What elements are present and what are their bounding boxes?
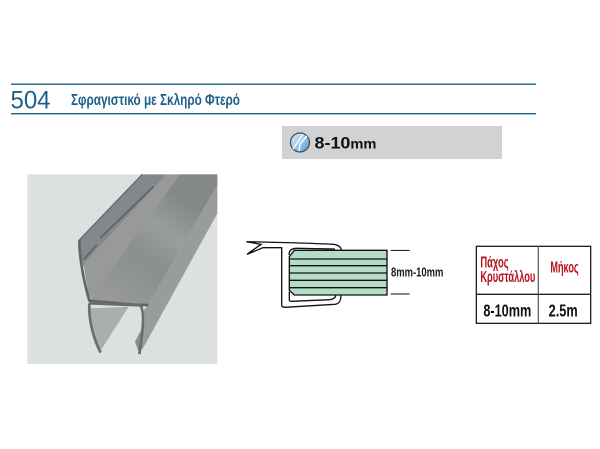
cross-section diagram bbox=[246, 242, 443, 307]
lower inner wall bbox=[89, 307, 129, 352]
glass thickness bar bbox=[282, 126, 502, 159]
value: thickness: 8-10mm bbox=[483, 301, 531, 321]
dark profile edges bbox=[79, 174, 142, 241]
upper fin bbox=[79, 174, 167, 267]
product photo: seal profile bbox=[27, 174, 217, 364]
dimension label: 8mm-10mm bbox=[391, 265, 443, 280]
main channel face bbox=[89, 174, 217, 305]
icon: glass thickness bbox=[290, 133, 310, 152]
seal outline bbox=[246, 242, 341, 307]
header band bbox=[10, 84, 536, 114]
header: length: Μήκος bbox=[550, 259, 579, 276]
header: glass thickness: Κρυστάλλου bbox=[480, 269, 535, 286]
value: length: 2.5m bbox=[549, 301, 578, 321]
dimension ticks bbox=[391, 250, 410, 294]
glass panel bbox=[289, 250, 387, 295]
product number: 504 bbox=[10, 86, 51, 114]
right outer wall bbox=[139, 185, 217, 350]
specification table bbox=[476, 246, 591, 323]
header: glass thickness: Πάχος bbox=[480, 255, 509, 272]
product title: Σφραγιστικό με Σκληρό Φτερό bbox=[71, 92, 240, 109]
thickness value: 8-10mm bbox=[314, 134, 376, 152]
